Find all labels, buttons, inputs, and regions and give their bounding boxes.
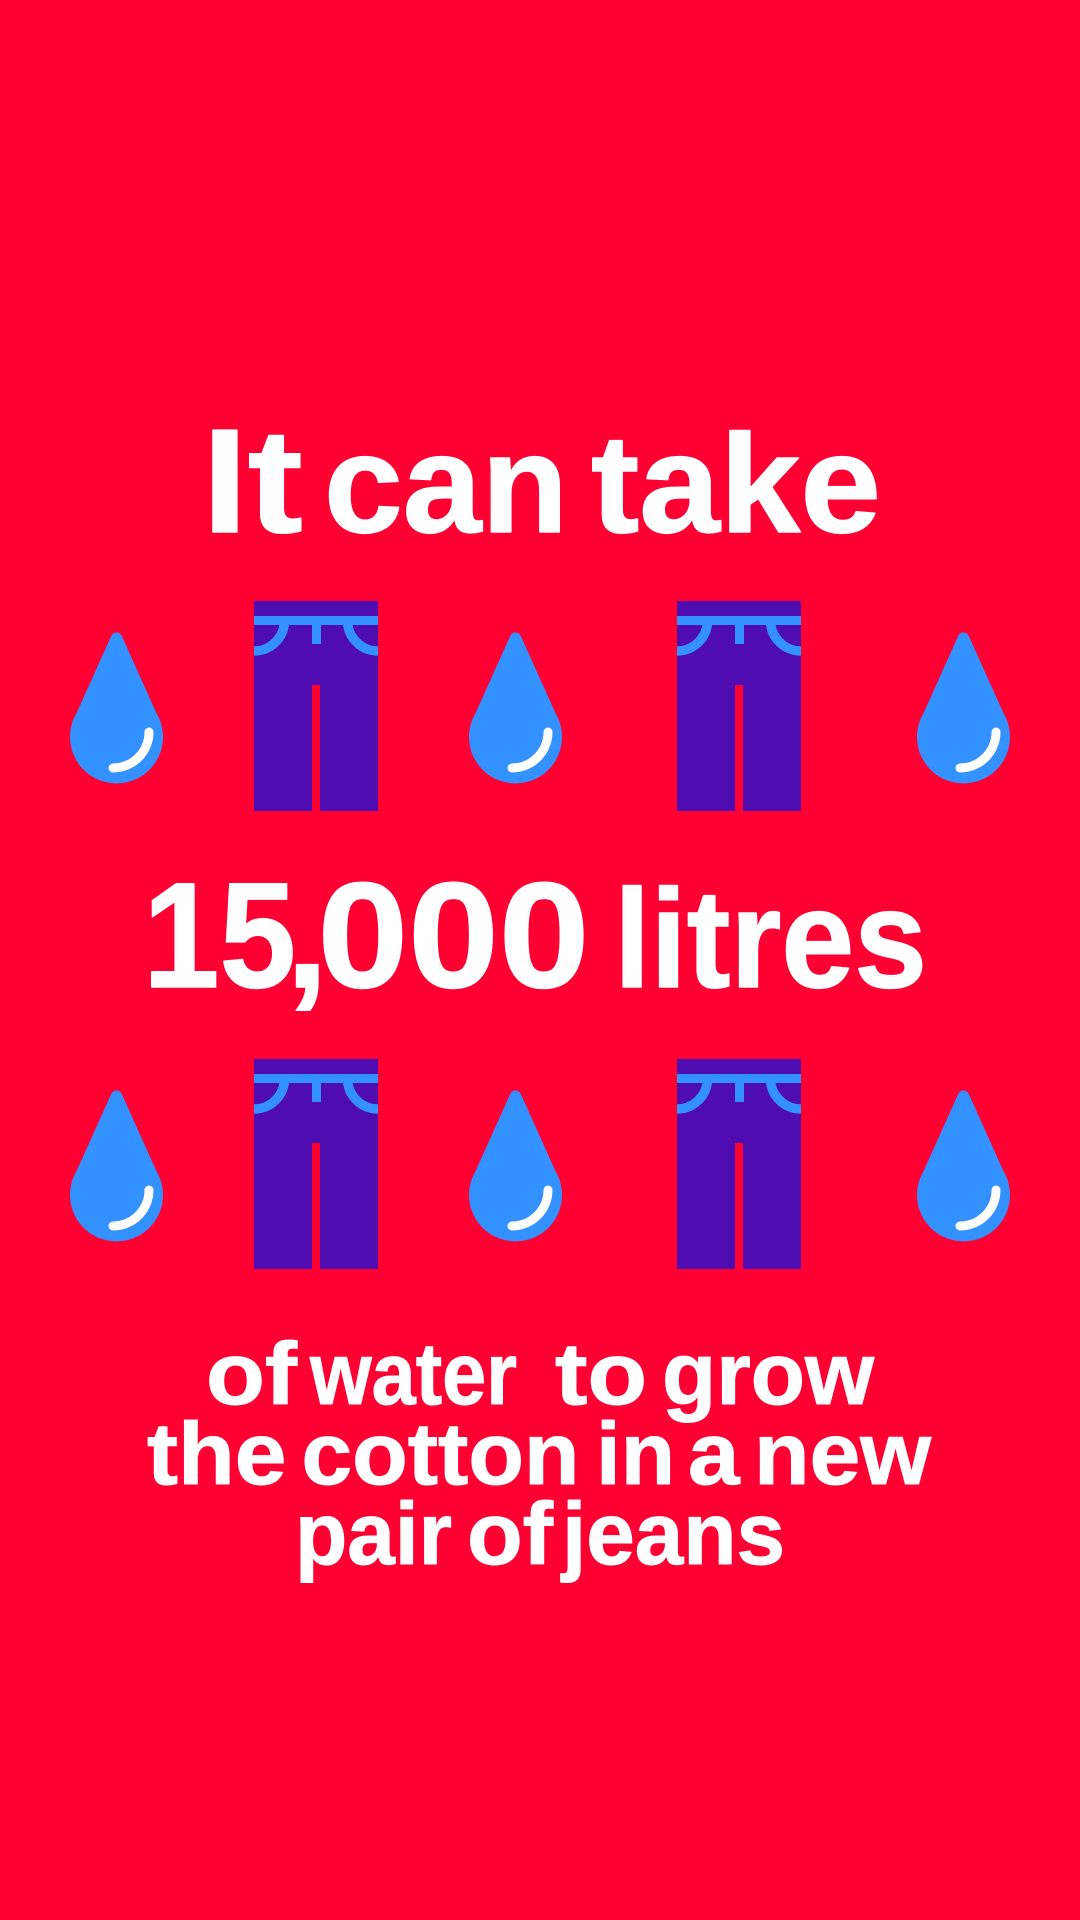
closing text line 1: water bbox=[309, 1324, 517, 1423]
closing text line 1: to bbox=[555, 1324, 647, 1423]
closing text line 2: the bbox=[147, 1404, 286, 1503]
icon: jeans row 2 left bbox=[254, 1059, 378, 1269]
key figure: 15,000 litres: , bbox=[286, 851, 328, 1019]
closing text line 2: in bbox=[596, 1404, 675, 1503]
closing text line 1: of bbox=[206, 1324, 298, 1423]
heading: It can take: take bbox=[591, 405, 881, 562]
heading: It can take bbox=[202, 399, 881, 564]
icon: water drop row 2 centre bbox=[469, 1091, 562, 1241]
icon: jeans row 1 left bbox=[254, 601, 378, 811]
heading: It can take: can bbox=[324, 405, 568, 562]
closing text line 3: of bbox=[467, 1484, 554, 1583]
icon: jeans row 1 right bbox=[677, 601, 801, 811]
icon: water drop row 1 centre bbox=[469, 633, 562, 783]
closing text line 2: a bbox=[688, 1404, 741, 1503]
closing text line 1 bbox=[206, 1324, 875, 1423]
closing text line 3: jeans bbox=[560, 1484, 785, 1583]
icon: water drop row 2 left bbox=[70, 1091, 163, 1241]
closing text block bbox=[147, 1324, 932, 1583]
closing text line 3: pair bbox=[295, 1484, 452, 1583]
heading: It can take: It bbox=[202, 399, 303, 564]
closing text line 2: new bbox=[754, 1404, 932, 1503]
key figure: 15,000 litres: litres bbox=[614, 860, 927, 1017]
icon: water drop row 1 right bbox=[917, 633, 1010, 783]
key figure: 15,000 litres: 000 bbox=[318, 851, 590, 1019]
icon: water drop row 2 right bbox=[917, 1091, 1010, 1241]
closing text line 1: grow bbox=[662, 1324, 875, 1423]
icon: water drop row 1 left bbox=[70, 633, 163, 783]
icon: jeans row 2 right bbox=[677, 1059, 801, 1269]
closing text line 3 bbox=[295, 1484, 785, 1583]
key figure: 15,000 litres bbox=[143, 851, 927, 1019]
closing text line 2 bbox=[147, 1404, 932, 1503]
key figure: 15,000 litres: 15 bbox=[143, 851, 296, 1019]
closing text line 2: cotton bbox=[302, 1404, 580, 1503]
